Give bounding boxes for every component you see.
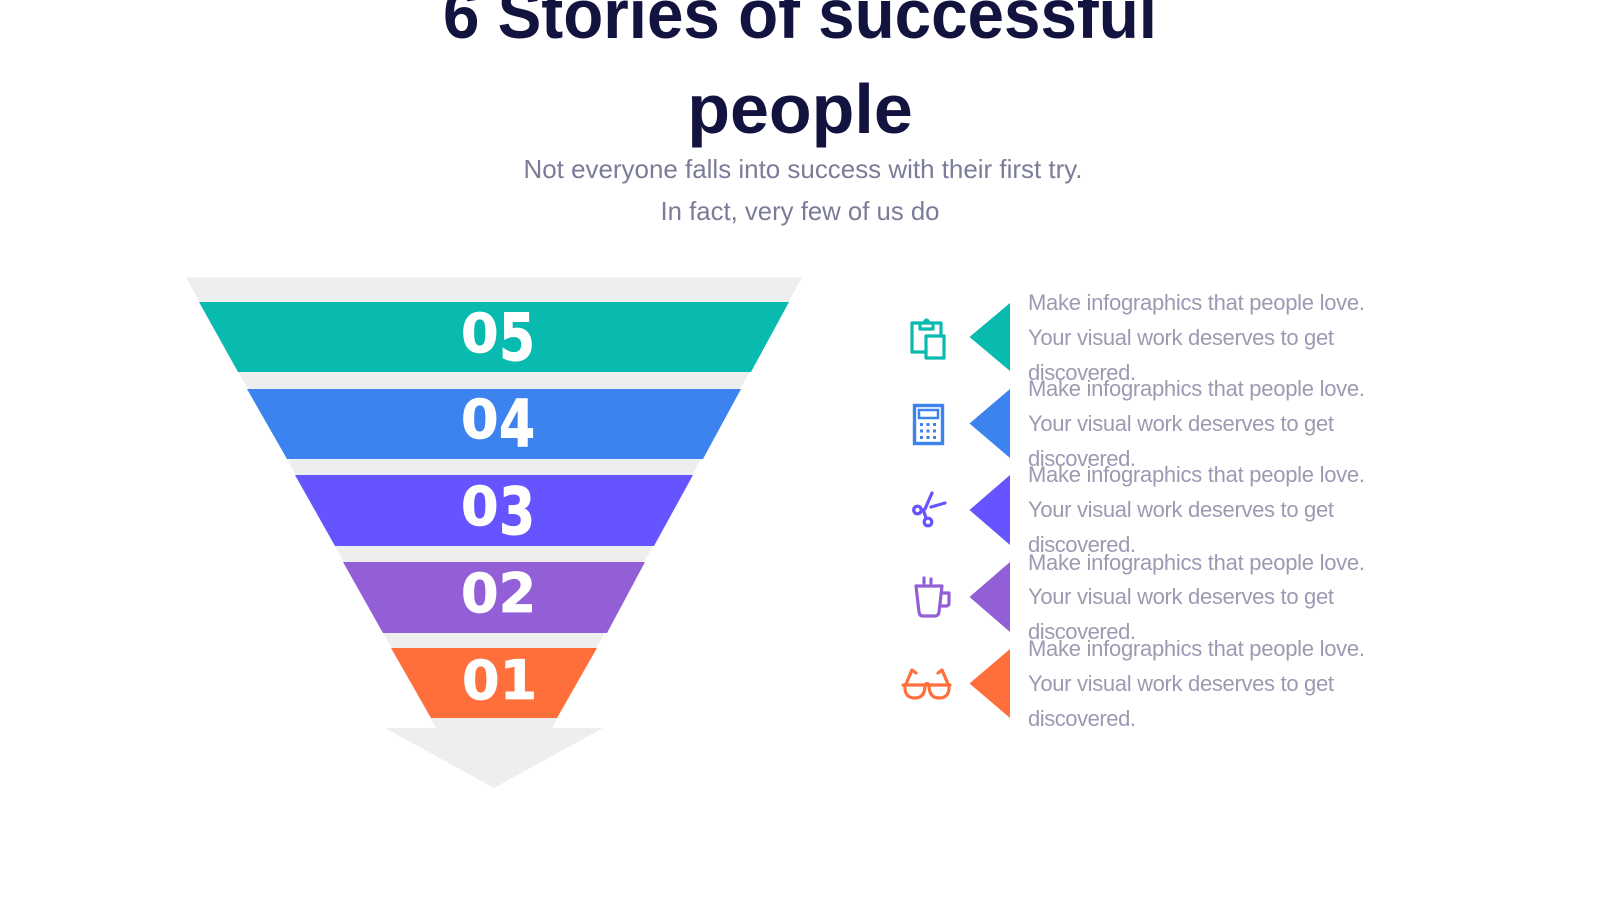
band 02: 02 (461, 562, 536, 625)
item 02 (916, 550, 1365, 644)
icon: calculator (914, 406, 942, 444)
pointer (970, 649, 1010, 718)
text block: discovered. (1028, 619, 1136, 644)
item 03 (914, 462, 1365, 557)
subtitle: In fact, very few of us do (660, 196, 940, 226)
text block: Your visual work deserves to get (1028, 411, 1334, 436)
item 01 (903, 636, 1365, 731)
text block: Your visual work deserves to get (1028, 671, 1334, 696)
band 05: 0 (461, 302, 499, 365)
band 01: 01 (462, 649, 537, 712)
text block: discovered. (1028, 360, 1136, 385)
text block: discovered. (1028, 532, 1136, 557)
band 03: 3 (499, 474, 535, 549)
band 04: 4 (499, 386, 535, 461)
pointer (970, 475, 1010, 545)
funnel (186, 278, 802, 788)
band 04: 0 (461, 388, 499, 451)
item 05 (912, 290, 1365, 385)
band 05 (199, 300, 789, 375)
text block: Make infographics that people love. (1028, 376, 1365, 401)
text block: Make infographics that people love. (1028, 636, 1365, 661)
pointer (970, 389, 1010, 458)
text block: Your visual work deserves to get (1028, 497, 1334, 522)
text block: discovered. (1028, 446, 1136, 471)
text block: Make infographics that people love. (1028, 290, 1365, 315)
icon: mug (916, 578, 949, 616)
band 03: 0 (461, 475, 499, 538)
icon: glasses (903, 670, 950, 698)
text block: Make infographics that people love. (1028, 550, 1365, 575)
item 04 (914, 376, 1365, 471)
title: people (687, 70, 913, 148)
funnel background with arrow (186, 278, 802, 788)
pointer (970, 562, 1010, 632)
subtitle: Not everyone falls into success with their first try. (524, 154, 1082, 184)
text block: Make infographics that people love. (1028, 462, 1365, 487)
subtitle (524, 154, 1082, 226)
icon: clipboard (912, 320, 944, 358)
text block: discovered. (1028, 706, 1136, 731)
band 03 (295, 474, 693, 549)
band 05: 5 (499, 300, 535, 375)
band 04 (247, 386, 741, 461)
icon: scissors (914, 493, 945, 526)
text block: Your visual work deserves to get (1028, 584, 1334, 609)
band 01 (391, 648, 597, 718)
band 02 (343, 562, 645, 633)
title (443, 0, 1157, 148)
pointer (970, 303, 1010, 371)
text block: Your visual work deserves to get (1028, 325, 1334, 350)
